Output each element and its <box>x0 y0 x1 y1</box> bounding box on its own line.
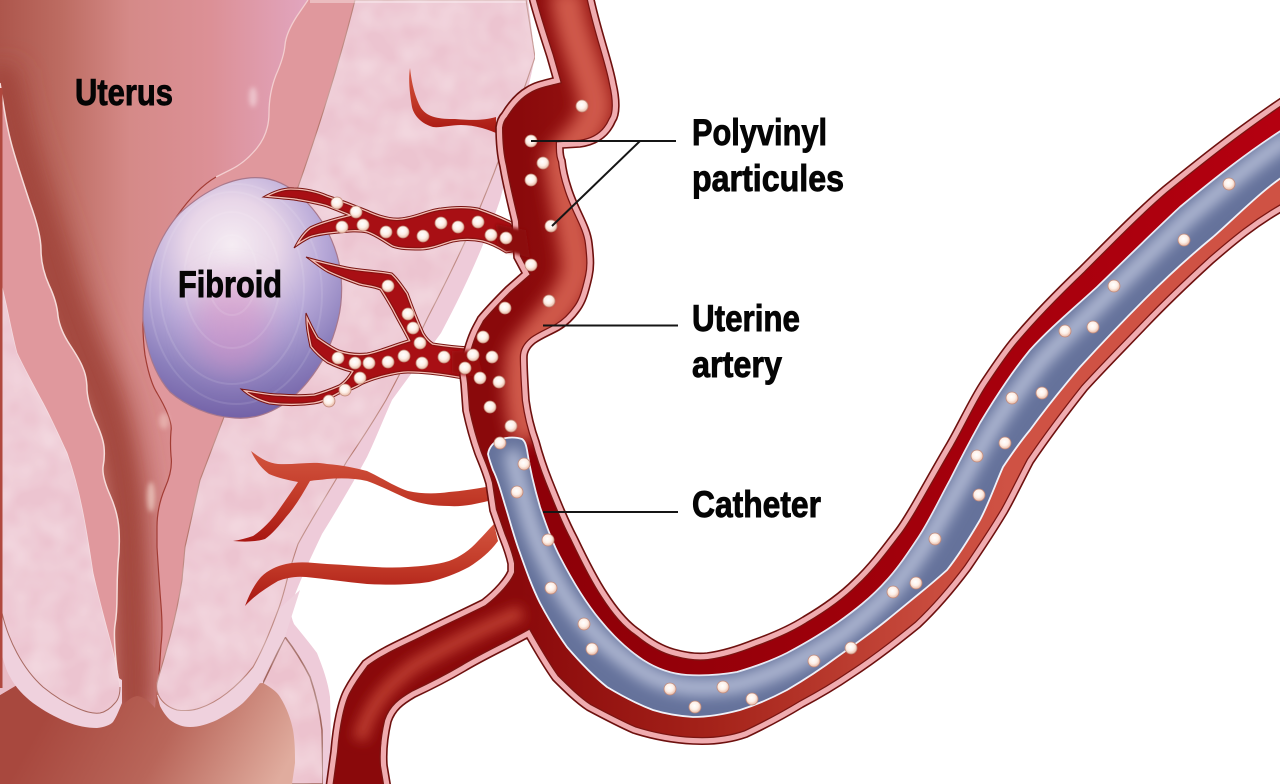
fibroid branch arteries: upper <box>263 188 525 253</box>
label: Uterine artery <box>692 298 800 385</box>
left lip lower edge line <box>2 613 120 713</box>
uterine artery <box>325 0 1280 784</box>
uterine wall mottled right <box>157 0 535 711</box>
uterine cavity <box>0 0 308 715</box>
fibroid <box>143 178 342 418</box>
small artery: top <box>409 68 496 133</box>
vagina <box>0 683 295 784</box>
left edge stripe <box>0 88 2 688</box>
leader lines <box>531 141 678 512</box>
polyvinyl particles <box>323 100 1235 713</box>
label: Uterus: Uterus <box>75 72 173 113</box>
panel: uterus anatomy <box>0 0 535 784</box>
label: Polyvinyl particules <box>692 112 844 199</box>
lower right wall strip <box>263 637 323 784</box>
right cervical lip band <box>157 590 300 727</box>
label: Polyvinyl particules: Polyvinyl <box>692 112 827 153</box>
left cervical lip mottled <box>2 287 120 713</box>
fibroid branch arteries: lower <box>241 257 490 406</box>
label: Uterine artery: artery <box>692 344 782 385</box>
label: Fibroid: Fibroid <box>178 264 282 305</box>
label: Uterine artery: Uterine <box>692 298 800 339</box>
catheter <box>488 125 1280 717</box>
label: Catheter: Catheter <box>692 484 821 525</box>
small artery: lower <box>245 524 498 606</box>
small artery: middle forked <box>233 451 488 542</box>
left corner wedge <box>0 640 17 695</box>
upper-tube blood <box>525 60 1280 680</box>
top highlight <box>310 0 526 3</box>
outer pale uterine layer <box>0 0 535 784</box>
left cervical lip band <box>0 610 122 728</box>
uterine muscle band <box>0 0 355 690</box>
light highlight <box>520 0 596 440</box>
label: Polyvinyl particules: particules <box>692 158 844 199</box>
junction blood patches <box>496 224 530 258</box>
